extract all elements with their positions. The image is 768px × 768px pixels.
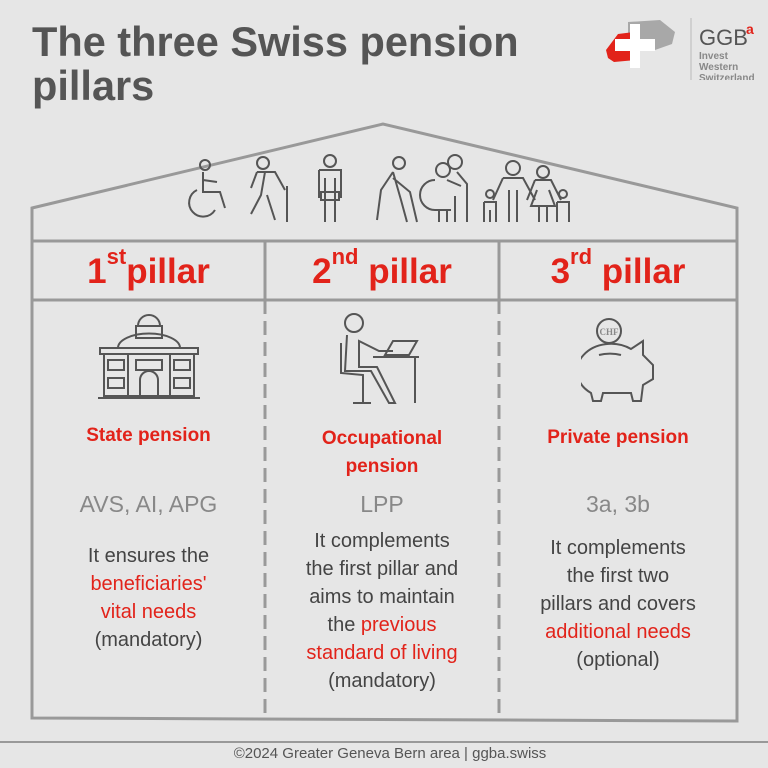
description (306, 530, 458, 692)
logo: Western (699, 62, 738, 73)
label: Occupational (322, 428, 442, 449)
description: It ensures the (88, 545, 209, 567)
description (88, 545, 209, 651)
title: The three Swiss pension (32, 18, 519, 65)
icons: people (188, 154, 570, 222)
description: (mandatory) (95, 629, 202, 651)
description: beneficiaries' (90, 573, 207, 595)
column 2 (306, 244, 458, 692)
icon: building (98, 314, 200, 399)
logo (606, 18, 755, 80)
description: the previous (328, 614, 436, 636)
description (540, 537, 696, 671)
pillar heading 3: 3rd pillar (551, 244, 685, 291)
code: LPP (360, 491, 404, 517)
description: standard of living (306, 642, 458, 664)
column 3 (540, 244, 696, 671)
description: It complements (314, 530, 450, 552)
footer: ©2024 Greater Geneva Bern area | ggba.swiss (234, 745, 546, 762)
code: AVS, AI, APG (80, 491, 217, 517)
description: It complements (550, 537, 686, 559)
description: (mandatory) (328, 670, 436, 692)
description: additional needs (545, 621, 691, 643)
label: pension (346, 456, 418, 477)
logo: a (746, 21, 754, 37)
description: vital needs (101, 601, 196, 623)
icon: piggy bank (581, 318, 654, 402)
logo: GGB (699, 25, 748, 50)
label: Private pension (547, 427, 689, 448)
description: the first pillar and (306, 558, 458, 580)
label (322, 428, 442, 477)
logo: Invest (699, 51, 729, 62)
pillar heading 1: 1stpillar (87, 244, 210, 291)
column 1 (80, 244, 217, 651)
description: (optional) (576, 649, 660, 671)
description: the first two (567, 565, 669, 587)
label: State pension (86, 425, 211, 446)
title (32, 18, 519, 109)
title: pillars (32, 62, 154, 109)
icon: desk worker (340, 313, 419, 404)
code: 3a, 3b (586, 491, 650, 517)
description: pillars and covers (540, 593, 696, 615)
pillar heading 2: 2nd pillar (312, 244, 452, 291)
icon: piggy bank: CHF (600, 327, 619, 337)
description: aims to maintain (309, 586, 455, 608)
